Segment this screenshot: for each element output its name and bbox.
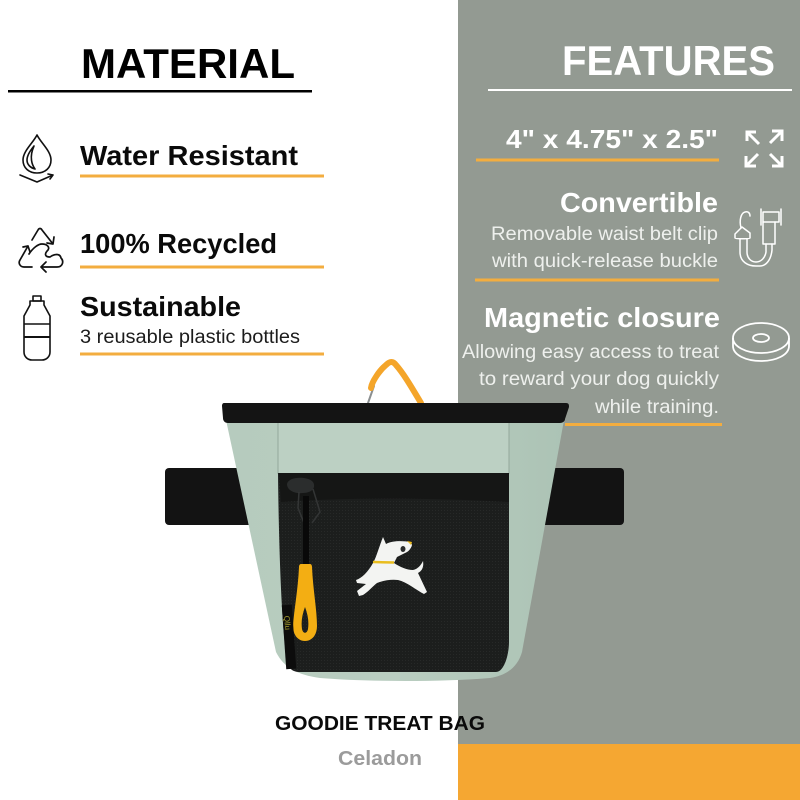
icon: recycle xyxy=(19,228,63,272)
side label tag xyxy=(282,605,296,669)
product: treat bag xyxy=(165,362,624,681)
zipper pull xyxy=(287,478,320,566)
material: recycled: 100% Recycled xyxy=(80,228,277,259)
black pocket xyxy=(278,473,509,672)
feature: magnetic closure: Magnetic closure xyxy=(484,302,720,333)
feature: dimensions xyxy=(476,124,719,162)
side label tag: Qllu xyxy=(282,615,292,630)
material: recycled xyxy=(80,228,324,268)
material: sustainable: Sustainable xyxy=(80,291,241,322)
material: water resistant: Water Resistant xyxy=(80,140,298,171)
icon: expand arrows xyxy=(746,131,782,166)
carabiner xyxy=(368,362,421,403)
dog logo xyxy=(356,537,427,596)
top rim xyxy=(222,403,569,423)
feature: dimensions: 4" x 4.75" x 2.5" xyxy=(506,124,718,154)
feature: convertible xyxy=(475,187,719,282)
panel: features list xyxy=(462,124,789,426)
icon: magnet disc xyxy=(733,323,789,361)
feature: convertible: Removable waist belt clip xyxy=(491,224,718,245)
material: sustainable: 3 reusable plastic bottles xyxy=(80,327,300,348)
caption: colour name: Celadon xyxy=(338,748,422,770)
pocket zip band xyxy=(279,473,509,502)
icon: bottle xyxy=(24,296,50,360)
panel seams xyxy=(278,422,509,474)
background panel: white left xyxy=(0,0,458,800)
background panel: grey right xyxy=(458,0,800,744)
material: sustainable xyxy=(80,291,324,356)
icon: belt clip xyxy=(735,209,781,266)
feature: convertible: Convertible xyxy=(560,187,718,218)
feature: magnetic closure: Allowing easy access to treat xyxy=(462,342,720,363)
footer orange block xyxy=(458,744,800,800)
feature: magnetic closure: to reward your dog quickly xyxy=(479,369,720,390)
feature: magnetic closure: while training. xyxy=(594,397,719,418)
yellow zip loop xyxy=(293,564,317,641)
caption: product name: GOODIE TREAT BAG xyxy=(275,713,485,735)
waist belt xyxy=(165,468,624,525)
bag body xyxy=(226,420,564,681)
feature: magnetic closure xyxy=(462,302,722,426)
feature: convertible: with quick-release buckle xyxy=(491,251,718,272)
upper centre panel xyxy=(278,422,509,474)
heading: features: FEATURES xyxy=(562,37,775,84)
icon: water drop xyxy=(20,135,53,182)
heading: material: MATERIAL xyxy=(81,40,295,87)
panel: material list xyxy=(19,135,324,360)
